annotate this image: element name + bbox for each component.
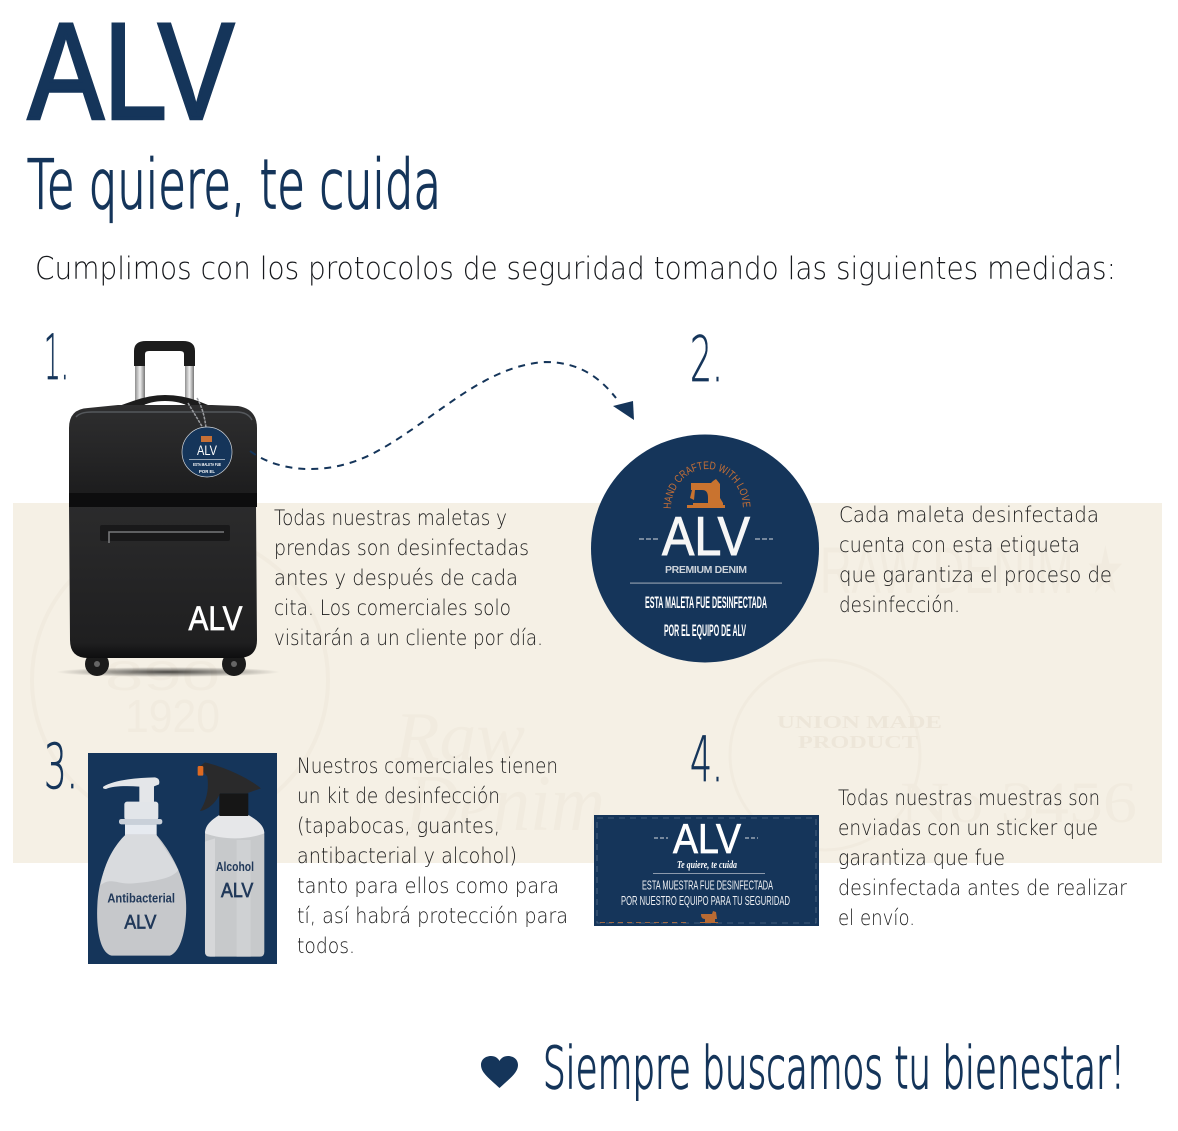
panel: beige background band: 890 — [105, 652, 220, 699]
text block 4: el envío. — [838, 906, 915, 930]
text block 1: prendas son desinfectadas — [274, 536, 529, 560]
text block 1: antes y después de cada — [274, 566, 518, 590]
suitcase body — [69, 405, 257, 658]
text block 4: desinfectada antes de realizar — [838, 876, 1127, 900]
text block 3: un kit de desinfección — [297, 784, 500, 808]
sticker line 1: ESTA MUESTRA FUE DESINFECTADA — [642, 878, 773, 892]
badge: disinfected label: POR EL EQUIPO DE ALV — [664, 621, 746, 640]
suitcase wheels — [85, 652, 246, 676]
sticker — [594, 815, 819, 926]
icon: sewing machine — [687, 479, 725, 508]
text block 1: visitarán a un cliente por día. — [274, 626, 543, 650]
text block 2: cuenta con esta etiqueta — [839, 533, 1080, 557]
text block 1: cita. Los comerciales solo — [274, 596, 511, 620]
text: 1. — [44, 321, 69, 394]
badge ALV: ALV — [662, 505, 750, 567]
text block 2: que garantiza el proceso de — [839, 563, 1112, 587]
panel: beige background band: PRODUCT — [798, 732, 918, 752]
sticker tagline: Te quiere, te cuida — [677, 860, 737, 871]
text block 4: Todas nuestras muestras son — [838, 786, 1100, 810]
icon: antibacterial pump bottle: ALV — [124, 912, 156, 933]
badge premium denim: PREMIUM DENIM — [665, 564, 747, 576]
icon: small sewing machine — [700, 911, 718, 923]
badge: disinfected label: ESTA MALETA FUE DESINFECTADA — [645, 593, 767, 612]
panel: beige background band: 1920 — [125, 690, 220, 742]
text block 3: Nuestros comerciales tienen — [297, 754, 558, 778]
panel: beige background band — [13, 503, 1162, 863]
icon: alcohol spray bottle: ALV — [221, 880, 254, 902]
text block 2 — [839, 503, 1112, 617]
text block 3 — [297, 754, 568, 958]
suitcase telescopic handle — [134, 341, 195, 407]
logo: ALV: ALV — [28, 0, 234, 148]
text block 1: Todas nuestras maletas y — [274, 506, 507, 530]
text block 4: enviadas con un sticker que — [838, 816, 1098, 840]
badge: disinfected label — [591, 434, 819, 662]
arrow: dashed curve — [250, 362, 634, 469]
badge ornaments — [639, 538, 773, 540]
icon: antibacterial pump bottle: Antibacterial — [107, 890, 175, 905]
heading: Te quiere, te cuida: Te quiere, te cuida — [27, 146, 441, 225]
text block 1 — [274, 506, 543, 650]
text block 3: (tapabocas, guantes, — [297, 814, 500, 838]
panel: sanitizer bottles — [88, 753, 277, 964]
text block 3: tanto para ellos como para — [297, 874, 559, 898]
sticker line 2: POR NUESTRO EQUIPO PARA TU SEGURIDAD — [621, 894, 790, 908]
icon: suitcase with tag — [56, 341, 280, 677]
panel: beige background band: UNION MADE — [777, 712, 942, 732]
number 3: 3. — [44, 730, 78, 803]
text block 4: garantiza que fue — [838, 846, 1005, 870]
panel: beige background band: Denim — [404, 760, 605, 848]
badge arc text: HAND CRAFTED WITH LOVE — [663, 461, 750, 508]
suitcase body: ALV — [188, 600, 243, 638]
tag: ALV — [197, 442, 218, 458]
icon: heart — [481, 1056, 518, 1088]
tag cord — [188, 398, 206, 428]
text block 2: Cada maleta desinfectada — [839, 503, 1099, 527]
suitcase carry handle — [116, 395, 213, 407]
sticker ALV: ALV — [673, 815, 741, 862]
text block 4 — [838, 786, 1127, 930]
icon: antibacterial pump bottle — [97, 777, 186, 956]
suitcase shadow — [56, 667, 280, 677]
icon: alcohol spray bottle: Alcohol — [216, 859, 254, 874]
text block 3: todos. — [297, 934, 355, 958]
tag — [182, 427, 232, 477]
number 4: 4. — [690, 723, 723, 796]
tag: ESTA MALETA FUE — [193, 462, 221, 467]
text block 3: antibacterial y alcohol) — [297, 844, 517, 868]
tag: POR EL — [199, 469, 215, 474]
panel: beige background band: No 3456 — [900, 770, 1137, 835]
icon: alcohol spray bottle — [198, 762, 264, 957]
text block 3: tí, así habrá protección para — [297, 904, 568, 928]
text block 2: desinfección. — [839, 593, 960, 617]
panel: beige background band: Raw — [394, 699, 525, 776]
number 2: 2. — [690, 323, 723, 396]
